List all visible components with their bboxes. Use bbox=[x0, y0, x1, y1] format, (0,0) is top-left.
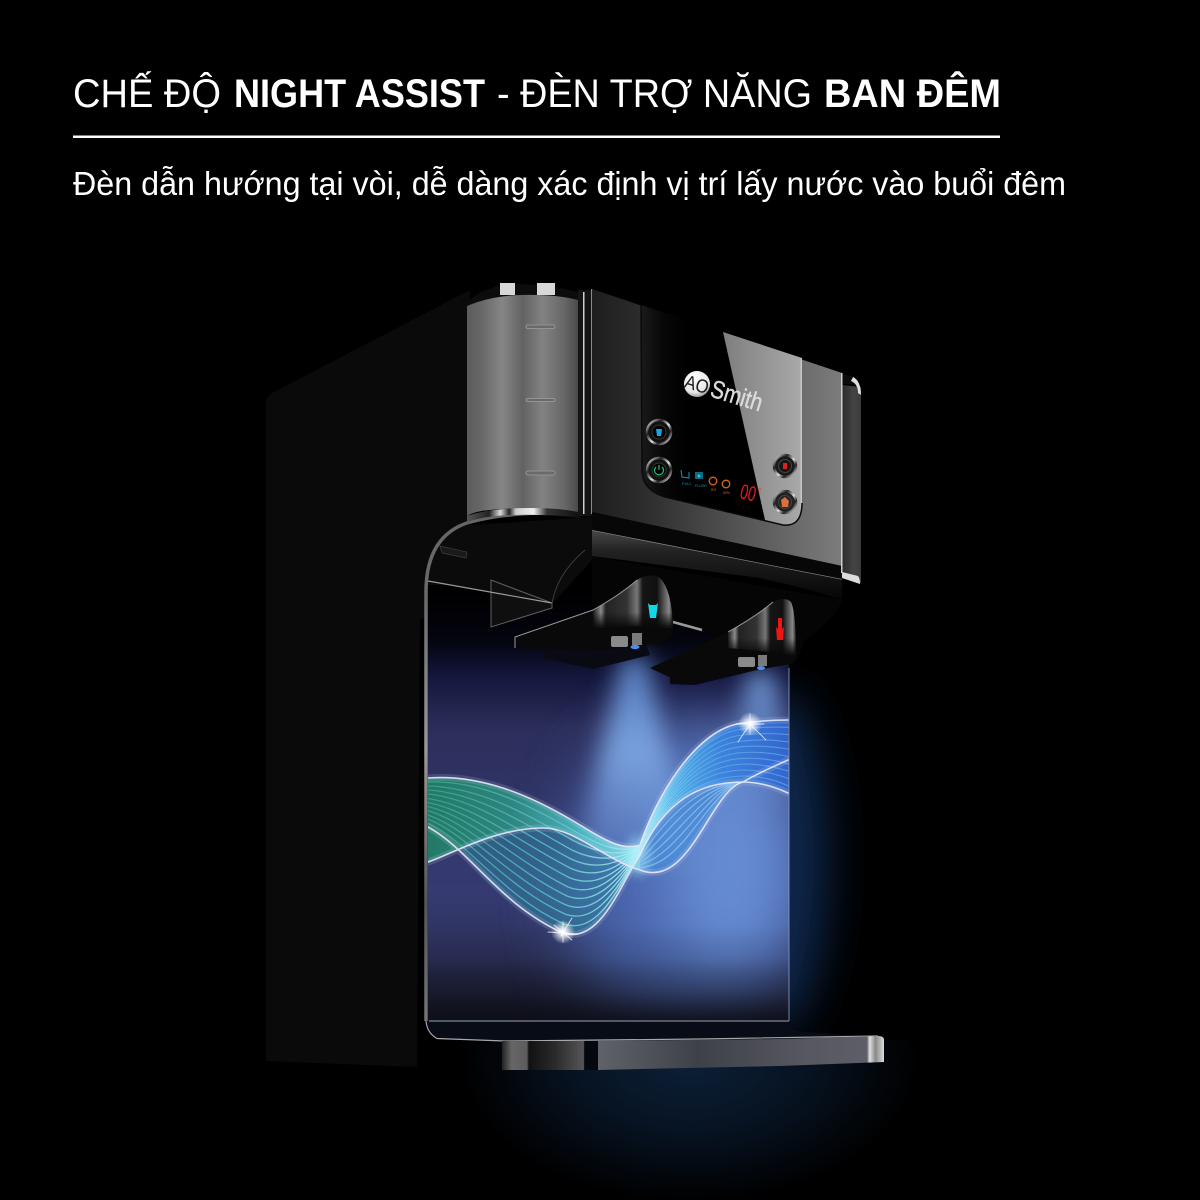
lower housing shade bbox=[592, 556, 842, 662]
brand logo: Smith bbox=[707, 375, 766, 417]
nozzle bbox=[611, 636, 628, 647]
wave ribbon bbox=[428, 712, 788, 944]
cylinder metal rim bbox=[467, 508, 580, 522]
title: - ĐÈN TRỢ NĂNG bbox=[497, 72, 812, 116]
chrome shade bbox=[593, 575, 673, 628]
blue band fill bbox=[640, 720, 788, 855]
sparkle bottom bbox=[548, 918, 578, 944]
base lip highlight bbox=[429, 1020, 789, 1022]
lower band tint bbox=[457, 828, 640, 935]
base lip edge bbox=[426, 1021, 878, 1041]
base lip bbox=[426, 1021, 870, 1041]
title: CHẾ ĐỘ bbox=[73, 72, 221, 116]
ambient light core bbox=[665, 740, 795, 980]
status icon: full: FULL bbox=[682, 481, 693, 486]
rear body bbox=[266, 290, 470, 1067]
title underline bbox=[73, 136, 1000, 138]
status icon: flush bbox=[695, 472, 707, 488]
title: NIGHT ASSIST bbox=[234, 72, 485, 116]
right side panel bbox=[842, 385, 861, 583]
display panel bbox=[641, 305, 802, 525]
lit window panel bbox=[428, 585, 789, 1021]
broad ambient light bbox=[570, 720, 810, 1060]
chrome shade bbox=[728, 599, 796, 655]
dispenser lower gloss band bbox=[592, 530, 842, 600]
display glare wedge bbox=[723, 332, 802, 525]
front control unit bbox=[592, 289, 842, 566]
lower right band tint bbox=[640, 785, 730, 872]
brushed cylinder bbox=[467, 295, 578, 516]
floor light glow bbox=[400, 1040, 1000, 1200]
crossing glow bbox=[626, 836, 650, 876]
title bbox=[73, 72, 1001, 116]
button: power bbox=[647, 458, 671, 482]
right side top cap bbox=[841, 373, 861, 573]
cup icon bbox=[648, 603, 658, 618]
housing interior bbox=[428, 517, 592, 604]
light beam left nozzle bbox=[578, 655, 692, 860]
chrome body bbox=[593, 575, 673, 628]
water purifier product bbox=[266, 283, 884, 1070]
bottom fade bbox=[428, 936, 788, 1020]
gloss band highlight bbox=[592, 530, 842, 579]
divider bar between faucets bbox=[673, 622, 702, 630]
status icon: flush: FLUSH bbox=[695, 484, 707, 488]
status icon: percent bbox=[722, 480, 730, 495]
brand logo bbox=[680, 367, 766, 417]
right strands bbox=[640, 727, 788, 854]
faucet: cold bbox=[515, 575, 673, 669]
green band fill bbox=[428, 778, 640, 870]
sparkle top bbox=[736, 712, 766, 742]
lower plate bbox=[543, 640, 650, 669]
right side bottom cap bbox=[842, 572, 860, 584]
ribbon edges bbox=[428, 720, 788, 935]
highlight edge bbox=[515, 580, 637, 648]
faucet: hot bbox=[650, 599, 796, 685]
side glow right of window bbox=[728, 690, 828, 1030]
status icon: percent: 50% bbox=[723, 491, 730, 495]
heat icon bbox=[776, 618, 784, 640]
bottom shadow band bbox=[592, 512, 842, 579]
temperature readout: 00 bbox=[738, 480, 766, 508]
arm bbox=[515, 575, 673, 650]
nozzle bbox=[738, 657, 755, 667]
cylinder slots bbox=[526, 325, 555, 475]
status icon: full bbox=[681, 470, 693, 486]
light beam right nozzle bbox=[725, 665, 788, 794]
centre column bbox=[578, 289, 593, 516]
button: temperature bbox=[774, 491, 796, 513]
status icon: RO bbox=[709, 477, 717, 492]
ribbon edge halos bbox=[428, 720, 788, 935]
subtitle: Đèn dẫn hướng tại vòi, dễ dàng xác định vị trí lấy nước vào buổi đêm bbox=[73, 165, 1066, 203]
left strands bbox=[428, 782, 640, 926]
arm bbox=[650, 599, 796, 682]
highlight edge bbox=[728, 602, 773, 632]
lower right strands bbox=[640, 782, 743, 868]
button: cold water bbox=[647, 420, 671, 444]
lower plate bbox=[670, 650, 790, 685]
top cap bbox=[467, 284, 578, 310]
title: BAN ĐÊM bbox=[824, 72, 1001, 116]
inner housing plate bbox=[428, 546, 585, 627]
glass frame bbox=[426, 513, 540, 1021]
status icon: RO: RO bbox=[711, 488, 717, 492]
button: hot water bbox=[774, 455, 796, 477]
chrome body bbox=[728, 599, 796, 655]
display border bbox=[641, 305, 802, 525]
brand logo: AO bbox=[682, 372, 711, 399]
window right edge bbox=[788, 668, 790, 1021]
temperature readout: °C bbox=[756, 488, 762, 495]
top cap metal tabs bbox=[500, 283, 555, 295]
drip tray front bbox=[502, 1036, 884, 1070]
